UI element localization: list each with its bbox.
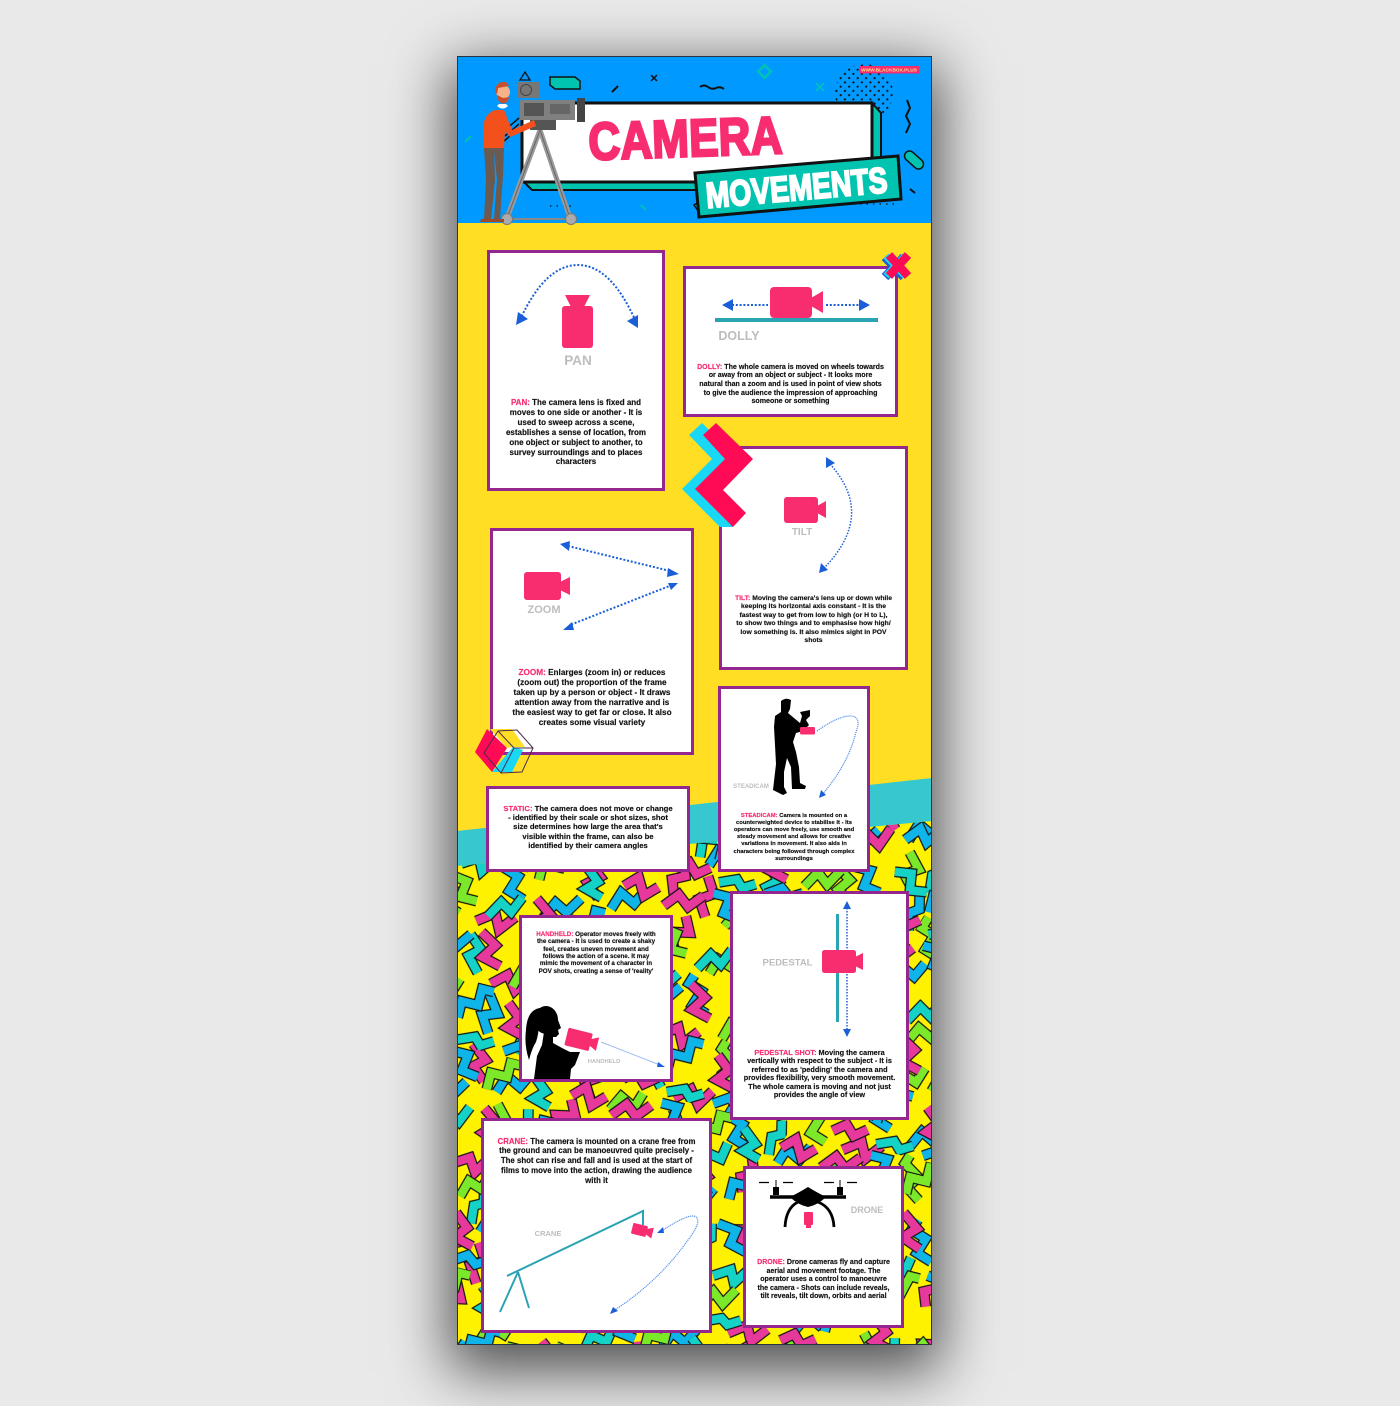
text: drone description: aerial and movement footage. The bbox=[767, 1268, 880, 1275]
icon: steadicam operator silhouette bbox=[773, 699, 810, 795]
text: zoom description bbox=[512, 668, 672, 727]
panel: handheld bbox=[519, 915, 673, 1082]
text: crane description bbox=[498, 1136, 696, 1185]
text: drone description: tilt reveals, tilt down, orbits and aerial bbox=[760, 1293, 887, 1300]
dolly track bbox=[715, 318, 878, 322]
icon: handheld camera bbox=[564, 1028, 600, 1053]
text: tilt description: shots bbox=[804, 637, 823, 644]
poster backing with shadow bbox=[457, 56, 932, 1345]
text: pan description: characters bbox=[556, 457, 596, 466]
text: pan description: moves to one side or another - It is bbox=[510, 408, 642, 417]
header blue band bbox=[457, 56, 932, 223]
icon: pan camera bbox=[562, 295, 593, 348]
panel: drone bbox=[743, 1166, 904, 1328]
yellow background bbox=[457, 222, 932, 1345]
panel: dolly bbox=[683, 266, 898, 417]
text: static description: STATIC: The camera does not move or change bbox=[503, 804, 673, 812]
text: dolly description: natural than a zoom and is used in point of view shots bbox=[699, 380, 882, 388]
text: steadicam description: operators can move freely, use smooth and bbox=[734, 827, 854, 833]
text: drone description: operator uses a control to manoeuvre bbox=[760, 1276, 887, 1283]
icon: zoom camera bbox=[524, 572, 570, 600]
text: crane description: with it bbox=[585, 1176, 608, 1185]
handheld arrow bbox=[601, 1042, 665, 1067]
text: tilt description bbox=[735, 595, 892, 644]
steadicam label: STEADICAM bbox=[733, 784, 769, 790]
text: steadicam description: surroundings bbox=[775, 856, 813, 862]
text: zoom description: ZOOM: Enlarges (zoom in) or reduces bbox=[519, 668, 665, 677]
text: crane description: The shot can rise and fall and is used at the start of bbox=[501, 1156, 692, 1165]
text: steadicam description: variations in movement. It also aids in bbox=[741, 841, 847, 847]
icon: pedestal camera bbox=[822, 950, 863, 973]
tilt arc arrow bbox=[819, 457, 852, 573]
pedestal label: PEDESTAL bbox=[763, 958, 813, 968]
text: crane description: CRANE: The camera is mounted on a crane free from bbox=[498, 1136, 695, 1146]
crane arc arrow bbox=[610, 1216, 698, 1314]
text: pedestal description: provides flexibility, very smooth movement. bbox=[744, 1073, 895, 1082]
icon: handheld operator silhouette bbox=[525, 1006, 580, 1079]
text: zoom description: (zoom out) the proportion of the frame bbox=[517, 678, 667, 687]
text: static description: identified by their camera angles bbox=[528, 841, 648, 850]
text: tilt description: low something is. It also mimics sight in POV bbox=[740, 629, 887, 636]
pedestal arrow bbox=[843, 901, 851, 1037]
panel: pedestal bbox=[730, 891, 909, 1120]
icon: drone bbox=[759, 1180, 857, 1227]
zigzag pattern area bbox=[457, 821, 932, 1345]
text: static description: - identified by their scale or shot sizes, shot bbox=[508, 813, 668, 822]
dolly arrows bbox=[722, 299, 870, 311]
text: handheld description: follows the action of a scene. It may bbox=[543, 953, 649, 960]
zoom arrows bbox=[560, 541, 679, 630]
steadicam path arrow bbox=[817, 716, 858, 798]
text: crane description: the ground and can be manoeuvred quite precisely - bbox=[499, 1146, 694, 1155]
text: handheld description: HANDHELD: Operator moves freely with bbox=[536, 931, 656, 938]
panel: pan bbox=[487, 250, 665, 491]
illustration: cameraman with tripod camera bbox=[480, 82, 585, 225]
drone label: DRONE bbox=[851, 1205, 883, 1215]
text: handheld description: mimic the movement of a character in bbox=[540, 960, 652, 967]
text: static description: visible within the frame, can also be bbox=[522, 832, 654, 841]
tilt label: TILT bbox=[792, 527, 812, 538]
text: drone description: the camera - Shots can include reveals, bbox=[758, 1285, 890, 1292]
panel: static bbox=[486, 786, 690, 872]
zoom label: ZOOM bbox=[528, 604, 560, 616]
icon: crane camera bbox=[631, 1223, 654, 1238]
text: handheld description: POV shots, creating a sense of 'reality' bbox=[539, 968, 653, 975]
text: dolly description bbox=[697, 362, 884, 405]
decoration: x mark bbox=[885, 255, 908, 277]
decoration: cube bbox=[475, 729, 533, 773]
text: handheld description: feel, creates uneven movement and bbox=[543, 946, 649, 953]
text: steadicam description: characters being followed through complex bbox=[733, 849, 855, 855]
header decorations bbox=[465, 64, 926, 210]
text: pan description: used to sweep across a scene, bbox=[518, 418, 634, 427]
text: static description bbox=[503, 804, 673, 850]
text: pan description: one object or subject to another, to bbox=[509, 438, 643, 447]
panel: zoom bbox=[490, 528, 694, 755]
text: zoom description: creates some visual variety bbox=[539, 718, 645, 727]
text: dolly description: or away from an object or subject - It looks more bbox=[709, 371, 872, 379]
poster outline bbox=[458, 56, 932, 1344]
text: pedestal description: PEDESTAL SHOT: Moving the camera bbox=[754, 1048, 885, 1056]
text: steadicam description: steady movement and allows for creative bbox=[737, 834, 851, 840]
icon: tilt camera bbox=[784, 497, 826, 523]
text: zoom description: attention away from the narrative and is bbox=[515, 698, 669, 707]
website tag bbox=[859, 66, 919, 74]
title: camera: CAMERA bbox=[587, 106, 783, 172]
text: steadicam description: STEADICAM: Camera is mounted on a bbox=[741, 812, 847, 818]
pedestal track bbox=[836, 914, 839, 1022]
panel: crane bbox=[481, 1118, 712, 1333]
text: drone description: DRONE: Drone cameras fly and capture bbox=[757, 1259, 890, 1266]
text: pedestal description: vertically with respect to the subject - It is bbox=[747, 1056, 892, 1065]
text: handheld description bbox=[536, 931, 656, 975]
text: pedestal description: referred to as 'pedding' the camera and bbox=[751, 1065, 888, 1074]
text: static description: size determines how large the area that's bbox=[513, 822, 663, 831]
text: steadicam description bbox=[733, 812, 855, 862]
decoration: chevrons bbox=[682, 423, 753, 527]
text: tilt description: keeping its horizontal axis constant - It is the bbox=[741, 603, 886, 610]
pan label: PAN bbox=[564, 353, 592, 368]
text: pan description bbox=[506, 398, 646, 466]
icon: drone camera bbox=[804, 1212, 813, 1228]
text: drone description bbox=[757, 1258, 890, 1300]
text: pan description: survey surroundings and to places bbox=[510, 448, 642, 457]
title banner: movements: MOVEMENTS bbox=[704, 159, 889, 216]
text: dolly description: to give the audience the impression of approaching bbox=[704, 389, 877, 397]
text: pedestal description: provides the angle of view bbox=[774, 1090, 865, 1099]
text: tilt description: to show two things and to emphasise how high/ bbox=[736, 620, 891, 627]
icon: dolly camera bbox=[770, 287, 823, 318]
text: dolly description: someone or something bbox=[751, 397, 830, 405]
handheld label: HANDHELD bbox=[588, 1059, 620, 1065]
text: handheld description: the camera - It is used to create a shaky bbox=[537, 938, 655, 945]
text: zoom description: taken up by a person or object - It draws bbox=[514, 688, 670, 697]
teal diagonal band bbox=[457, 778, 932, 870]
text: pan description: PAN: The camera lens is fixed and bbox=[511, 398, 641, 407]
website tag: WWW.BLACKBOX.PLUS bbox=[861, 68, 918, 74]
text: tilt description: TILT: Moving the camera's lens up or down while bbox=[735, 595, 892, 602]
crane label: CRANE bbox=[535, 1229, 561, 1238]
text: dolly description: DOLLY: The whole camera is moved on wheels towards bbox=[697, 362, 884, 370]
panel: tilt bbox=[719, 446, 908, 670]
title frame bbox=[522, 103, 881, 190]
text: crane description: films to move into the action, drawing the audience bbox=[501, 1166, 692, 1175]
pan arc arrow bbox=[516, 265, 638, 328]
panel: steadicam bbox=[718, 686, 870, 872]
text: tilt description: fastest way to get from low to high (or H to L), bbox=[739, 612, 888, 619]
text: zoom description: the easiest way to get far or close. It also bbox=[512, 708, 672, 717]
icon: steadicam camera bbox=[800, 727, 815, 734]
text: steadicam description: counterweighted device to stabilise it - Its bbox=[736, 820, 852, 826]
icon: crane arm and tripod bbox=[500, 1211, 643, 1312]
text: pedestal description bbox=[744, 1048, 895, 1099]
text: pan description: establishes a sense of location, from bbox=[506, 428, 646, 437]
dolly label: DOLLY bbox=[718, 329, 760, 343]
text: pedestal description: The whole camera is moving and not just bbox=[748, 1082, 891, 1091]
